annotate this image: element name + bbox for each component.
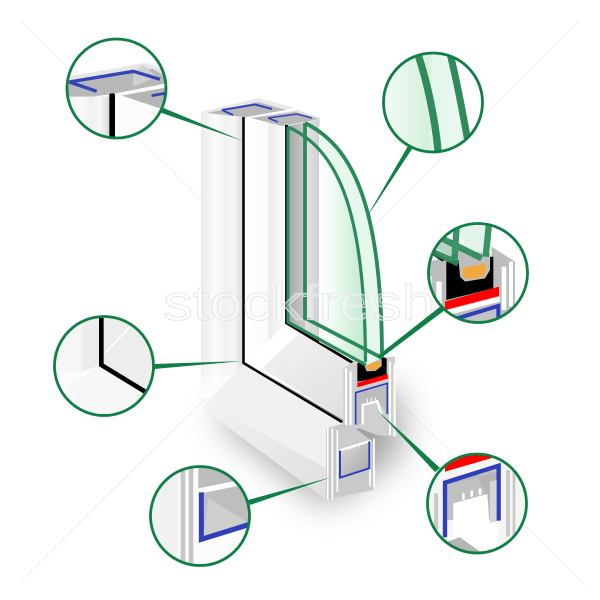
callout 2 leader: [365, 146, 412, 220]
lower sash face: [246, 325, 358, 420]
callout 5: lower chamber detail: [147, 463, 253, 570]
top cap of outer frame: [201, 98, 295, 118]
callout 4: frame chamber detail: [426, 452, 528, 554]
callout 6: corner joint detail: [50, 313, 157, 420]
sash column: [246, 118, 285, 362]
glass panes: [288, 123, 382, 366]
callout 2: double glazing detail: [380, 50, 487, 157]
callout 3 leader: [376, 306, 445, 358]
drop shadow: [215, 370, 400, 505]
upper cross section: [343, 356, 397, 437]
black seal lines: [244, 117, 358, 422]
callout 6 leader: [154, 361, 243, 369]
callout 1: frame top detail: [63, 37, 170, 143]
watermark text: stockfresh: [163, 275, 435, 331]
outer frame left column: [201, 112, 243, 396]
callout 1 leader: [159, 107, 243, 141]
callout 5 leader: [248, 477, 332, 505]
callout 3: glass seat detail: [427, 222, 529, 324]
window profile: [201, 98, 397, 499]
lower outer frame face: [202, 364, 344, 499]
lower cross section: [326, 423, 374, 499]
sash top cap: [250, 110, 320, 126]
callout 4 leader: [377, 410, 440, 472]
fade at column bottom: [201, 360, 243, 398]
reveal behind glass: [288, 120, 382, 367]
